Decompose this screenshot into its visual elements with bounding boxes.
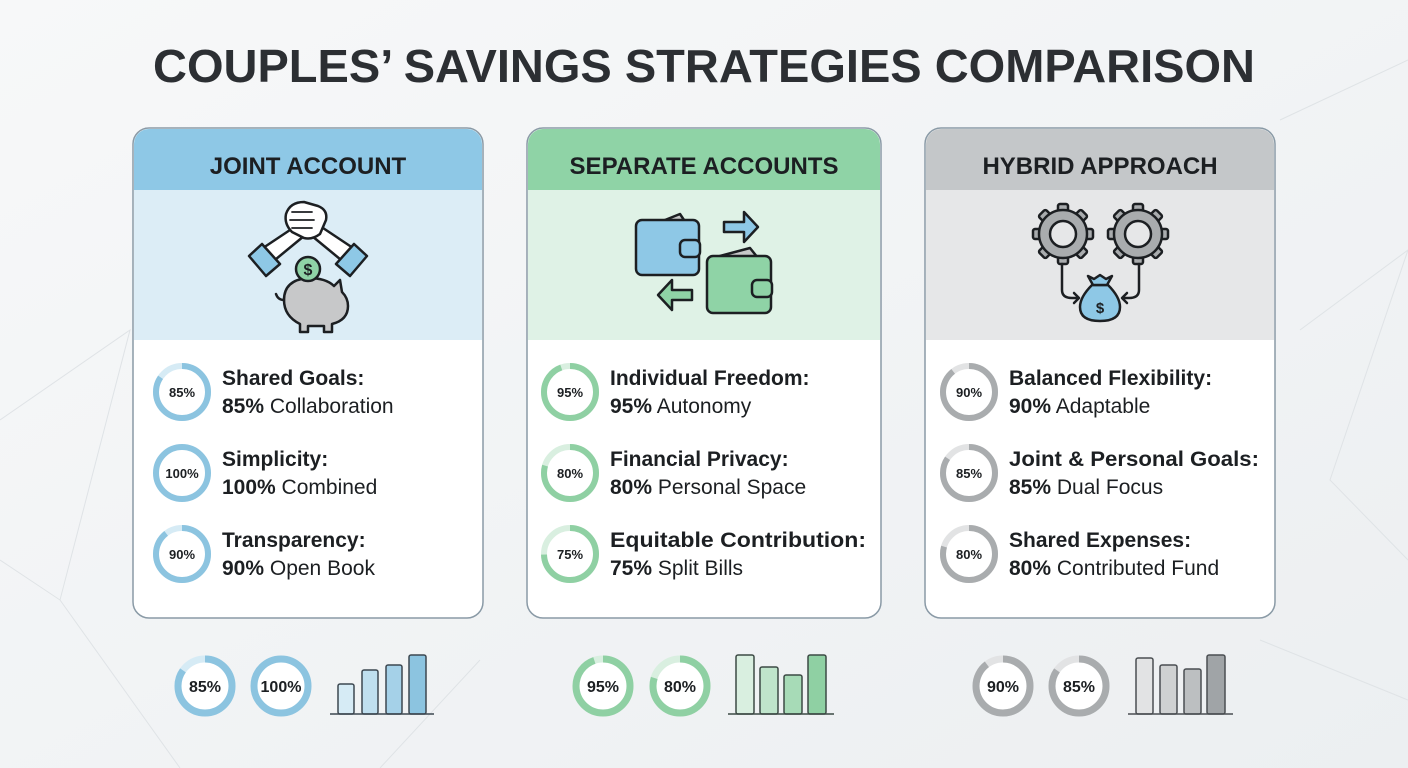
panel: joint account [133,128,483,618]
text: simplicity: Simplicity: [222,448,328,471]
ring: 85% [1052,659,1106,713]
text: shared expenses: Shared Expenses: [1009,529,1191,552]
bar chart [330,655,434,714]
text: shared goals: 85% Collaboration [222,395,394,418]
text: individual freedom [610,367,810,418]
text: joint & personal goals: 85% Dual Focus [1009,476,1163,499]
text: simplicity: 100% Combined [222,476,377,499]
ring: 80%: 80% [664,679,696,696]
text: equitable contribution [610,529,866,580]
text: balanced flexibility [1009,367,1212,418]
heading: hybrid approach: HYBRID APPROACH [982,153,1218,180]
ring: 80% [653,659,707,713]
text: transparency: 90% Open Book [222,557,375,580]
text: equitable contribution: 75% Split Bills [610,557,743,580]
text: transparency: Transparency: [222,529,366,552]
bar chart [1128,655,1233,714]
ring: 80% shared expenses: 80% [956,547,982,562]
ring: 75% equitable contribution [544,528,596,580]
ring: 80% shared expenses [943,528,995,580]
ring: 85% joint & personal goals [943,447,995,499]
heading: joint account: JOINT ACCOUNT [210,153,407,180]
summary: separate accounts [576,655,834,714]
text: financial privacy: Financial Privacy: [610,448,789,471]
ring: 95% individual freedom: 95% [557,385,583,400]
ring: 85% shared goals: 85% [169,385,195,400]
text: individual freedom: 95% Autonomy [610,395,752,418]
ring: 90% balanced flexibility: 90% [956,385,982,400]
ring: 85%: 85% [1063,679,1095,696]
text: joint & personal goals: Joint & Personal Goals: [1009,448,1259,471]
text: shared expenses [1009,529,1219,580]
ring: 90% balanced flexibility [943,366,995,418]
ring: 90% transparency [156,528,208,580]
ring: 100%: 100% [261,679,301,696]
ring: 95% individual freedom [544,366,596,418]
ring: 85%: 85% [189,679,221,696]
text: shared expenses: 80% Contributed Fund [1009,557,1219,580]
ring: 95% [576,659,630,713]
icon: gears and money bag [1033,204,1168,321]
panel: joint account: $ [304,262,313,279]
ring: 75% equitable contribution: 75% [557,547,583,562]
text: financial privacy [610,448,806,499]
text: balanced flexibility: Balanced Flexibility: [1009,367,1212,390]
ring: 90%: 90% [987,679,1019,696]
text: joint & personal goals [1009,448,1259,499]
title: COUPLES’ SAVINGS STRATEGIES COMPARISON [153,40,1255,92]
ring: 85% joint & personal goals: 85% [956,466,982,481]
text: individual freedom: Individual Freedom: [610,367,810,390]
ring: 85% [178,659,232,713]
ring: 100% [254,659,308,713]
summary: joint account [178,655,434,714]
text: shared goals [222,367,394,418]
text: shared goals: Shared Goals: [222,367,364,390]
ring: 100% simplicity [156,447,208,499]
icon: wallets with arrows [636,212,772,313]
panel: hybrid approach [925,128,1275,618]
ring: 85% shared goals [156,366,208,418]
ring: 90% [976,659,1030,713]
ring: 90% transparency: 90% [169,547,195,562]
heading: separate accounts: SEPARATE ACCOUNTS [570,153,838,180]
panel: hybrid approach: $ [1096,300,1105,317]
text: balanced flexibility: 90% Adaptable [1009,395,1150,418]
icon: handshake and piggy bank [249,202,367,332]
ring: 80% financial privacy [544,447,596,499]
ring: 95%: 95% [587,679,619,696]
text: financial privacy: 80% Personal Space [610,476,806,499]
bar chart [728,655,834,714]
summary: hybrid approach [976,655,1233,714]
text: equitable contribution: Equitable Contribution: [610,529,866,552]
text: simplicity [222,448,377,499]
ring: 100% simplicity: 100% [165,466,199,481]
panel: separate accounts [527,128,881,618]
ring: 80% financial privacy: 80% [557,466,583,481]
text: transparency [222,529,375,580]
